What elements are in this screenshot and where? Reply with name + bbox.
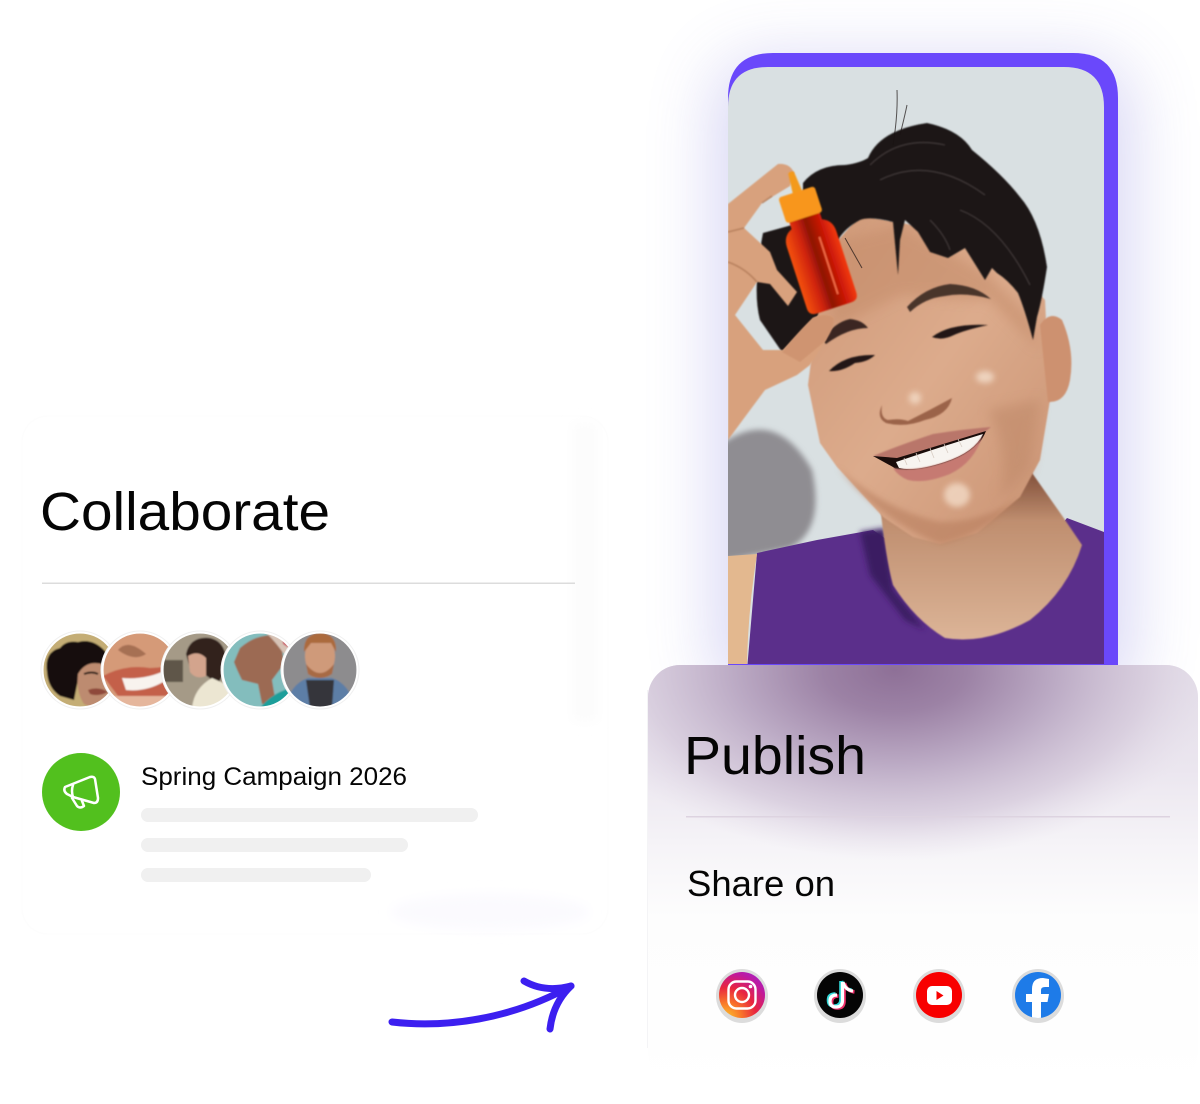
icon: Instagram bbox=[716, 969, 768, 1023]
bottle highlight bbox=[819, 237, 838, 294]
front hair bbox=[803, 123, 1047, 340]
avatar 1: curly hair bbox=[41, 631, 119, 709]
face bbox=[808, 215, 1050, 544]
bottle cap bbox=[778, 186, 823, 223]
ear bbox=[1040, 316, 1071, 402]
serum bottle bbox=[778, 170, 858, 316]
avatar 2: smile close up bbox=[101, 631, 179, 709]
nose bbox=[880, 398, 952, 425]
campaign icon: green megaphone bbox=[42, 753, 120, 831]
icon: YouTube bbox=[913, 969, 965, 1023]
shirt collar shadow bbox=[860, 528, 925, 630]
avatar group bbox=[41, 631, 359, 709]
wall shadow bbox=[720, 430, 816, 562]
icon: TikTok bbox=[814, 969, 866, 1023]
avatar 4: man with teal background bbox=[221, 631, 299, 709]
cheek shading bbox=[994, 404, 1036, 482]
portrait photo bbox=[720, 67, 1104, 670]
neck bbox=[880, 470, 1082, 640]
upper lip bbox=[873, 427, 991, 460]
card soft edge bbox=[22, 416, 608, 934]
share label: Share on bbox=[687, 863, 835, 904]
forehead shading bbox=[835, 222, 1030, 334]
mouth interior and teeth bbox=[873, 431, 986, 473]
phone glow bbox=[715, 60, 1131, 700]
wall bbox=[728, 67, 1104, 664]
card lower lavender tint bbox=[390, 894, 590, 930]
bottle dropper tip bbox=[788, 170, 802, 194]
panel: collaborate card bbox=[40, 491, 575, 882]
arrow bbox=[392, 981, 571, 1029]
heading: Publish: Publish bbox=[684, 726, 866, 786]
avatar 5: man in denim shirt bbox=[281, 631, 359, 709]
hair behind bbox=[756, 224, 820, 351]
heading: Collaborate: Collaborate bbox=[40, 482, 330, 542]
card right shadow bbox=[572, 422, 598, 722]
hand and fingers bbox=[728, 164, 834, 440]
lower lip bbox=[893, 434, 983, 481]
thumb bbox=[782, 315, 834, 362]
shoulder bbox=[728, 554, 757, 665]
icon: Facebook bbox=[1012, 969, 1064, 1023]
bottle body bbox=[780, 210, 859, 316]
jaw shading bbox=[840, 472, 1006, 544]
phone frame bbox=[728, 53, 1118, 665]
hair sheen bbox=[870, 142, 1030, 285]
campaign title: Spring Campaign 2026 bbox=[141, 763, 407, 791]
avatar 3: woman in white bbox=[161, 631, 239, 709]
divider bbox=[42, 582, 575, 584]
card purple glow bbox=[560, 640, 1200, 880]
hair strands bbox=[845, 90, 907, 268]
panel: publish card bbox=[647, 665, 1198, 1048]
panel: phone with portrait bbox=[715, 53, 1131, 700]
card background bbox=[648, 665, 1198, 1085]
eyebrows bbox=[907, 284, 991, 312]
divider bbox=[686, 816, 1170, 818]
eyes bbox=[932, 325, 988, 339]
finger creases bbox=[728, 196, 772, 282]
card left edge bbox=[647, 690, 648, 1048]
shirt bbox=[747, 518, 1104, 670]
cheek and nose highlights bbox=[909, 371, 994, 507]
placeholder text lines bbox=[141, 808, 478, 882]
